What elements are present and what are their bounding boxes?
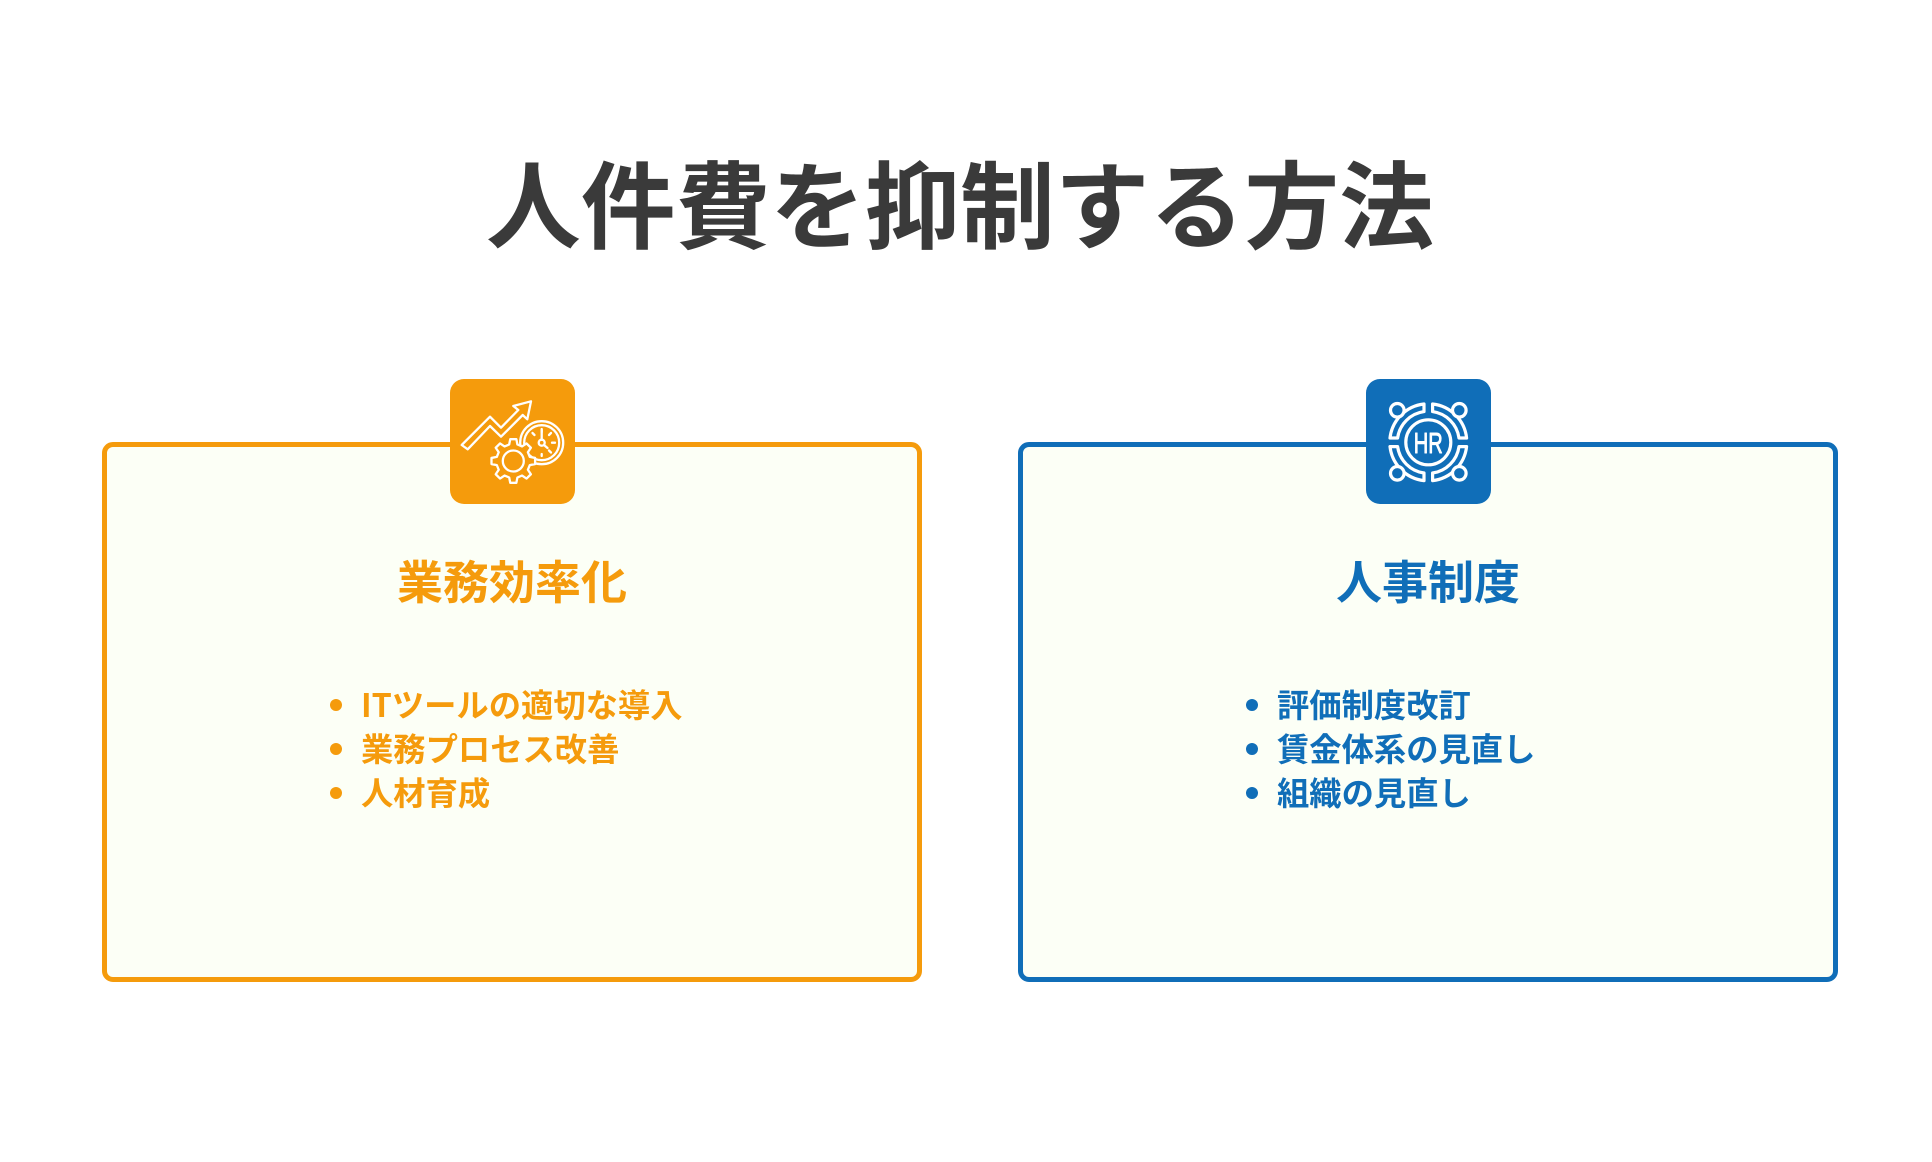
list: 業務効率化 items: ITツールの適切な導入 <box>361 680 683 726</box>
icon: growth arrow, gear and clock <box>450 379 575 504</box>
list: 業務効率化 items: 人材育成 <box>361 768 490 814</box>
panel: 人事制度 <box>1018 442 1838 982</box>
icon: HR circle with people <box>1366 379 1491 504</box>
heading: 人事制度: 人事制度 <box>1336 546 1520 612</box>
list: 業務効率化 items: 業務プロセス改善 <box>361 724 619 770</box>
list: 業務効率化 items <box>330 680 683 814</box>
heading: 業務効率化: 業務効率化 <box>397 546 627 612</box>
list: 人事制度 items: 組織の見直し <box>1277 768 1471 814</box>
list: 人事制度 items: 賃金体系の見直し <box>1277 724 1535 770</box>
icon: HR circle with people: HR <box>1414 428 1443 460</box>
panel: 業務効率化 <box>102 442 922 982</box>
list: 人事制度 items <box>1246 680 1535 814</box>
list: 人事制度 items: 評価制度改訂 <box>1277 680 1471 726</box>
title: 人件費を抑制する方法 <box>486 132 1434 269</box>
